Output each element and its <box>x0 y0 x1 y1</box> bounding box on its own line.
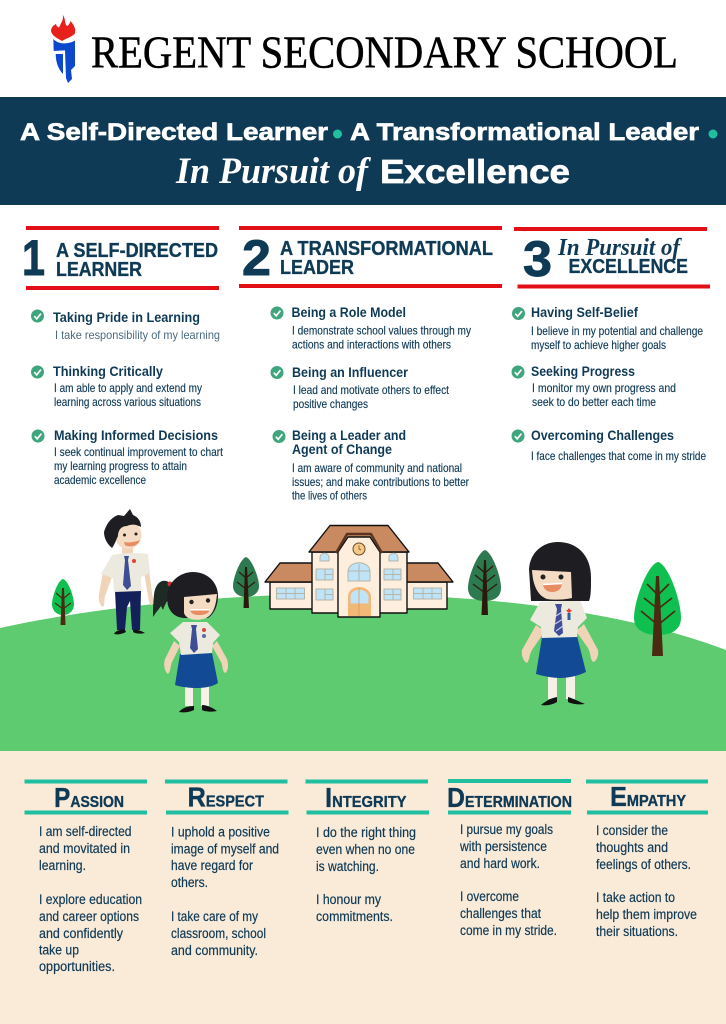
character: boy student <box>99 509 153 634</box>
item: taking pride in learning: Taking Pride in Learning <box>53 310 200 325</box>
panel: in pursuit of excellence <box>512 227 710 463</box>
item: having self-belief: myself to achieve higher goals <box>531 338 666 352</box>
value: empathy <box>586 780 708 939</box>
tie <box>123 556 131 590</box>
value: respect: classroom, school <box>171 926 266 941</box>
heading: section three: 3 <box>523 231 552 287</box>
central block <box>312 552 407 613</box>
value: passion: and confidently <box>39 926 123 941</box>
hair <box>104 509 141 548</box>
item: being a leader and agent of change <box>272 428 469 502</box>
item: being a leader and agent of change: Being a Leader and <box>292 428 406 443</box>
value: determination: challenges that <box>460 906 541 921</box>
door <box>348 587 371 616</box>
value: determination: DETERMINATION <box>447 782 572 813</box>
value: respect: and community. <box>171 943 258 958</box>
heading: section three: EXCELLENCE <box>568 256 688 278</box>
value: determination: with persistence <box>459 839 547 854</box>
item: seeking progress: Seeking Progress <box>531 364 635 379</box>
value: passion: and movitated in <box>39 841 130 856</box>
trousers <box>115 591 141 630</box>
value: passion: PASSION <box>54 782 124 813</box>
value: respect <box>165 780 288 958</box>
item: taking pride in learning: I take responsibility of my learning <box>55 328 220 342</box>
value: passion: I explore education <box>39 892 142 907</box>
value: passion <box>24 780 147 974</box>
ponytail <box>153 581 172 617</box>
item: taking pride in learning <box>31 310 220 342</box>
item: being a leader and agent of change: Agent of Change <box>292 442 392 457</box>
badge <box>132 559 136 563</box>
skirt <box>536 636 586 678</box>
arms <box>99 570 153 607</box>
heading: section two: 2 <box>242 230 271 286</box>
arms <box>164 641 228 674</box>
item: thinking critically: I am able to apply and extend my <box>54 381 202 395</box>
green hill <box>0 594 726 752</box>
item: seeking progress: I monitor my own progress and <box>532 381 676 395</box>
item: making informed decisions: my learning progress to attain <box>54 459 187 473</box>
value: respect: I take care of my <box>171 909 258 924</box>
value: determination: come in my stride. <box>460 923 557 938</box>
right wing <box>406 582 447 609</box>
windows <box>276 553 442 600</box>
value: empathy: feelings of others. <box>596 857 691 872</box>
tie <box>190 625 198 653</box>
item: thinking critically <box>31 364 202 409</box>
value: integrity: is watching. <box>316 859 379 874</box>
value: integrity: commitments. <box>316 909 393 924</box>
hair <box>167 572 218 618</box>
item: making informed decisions: academic excellence <box>54 473 146 487</box>
panel: a self-directed learner <box>22 226 224 487</box>
value: integrity: I honour my <box>316 892 381 907</box>
clock <box>353 543 365 555</box>
school name: REGENT SECONDARY SCHOOL <box>91 28 678 78</box>
value: empathy: I consider the <box>596 823 668 838</box>
icon: school torch logo <box>51 15 75 83</box>
value: passion: and career options <box>39 909 139 924</box>
face <box>532 570 572 600</box>
value: integrity: INTEGRITY <box>325 782 407 813</box>
legs <box>548 675 557 699</box>
item: having self-belief: Having Self-Belief <box>531 305 638 320</box>
banner line two <box>175 151 570 192</box>
item: making informed decisions: I seek continual improvement to chart <box>54 445 224 459</box>
item: being a role model: actions and interactions with others <box>292 338 451 352</box>
banner line one: A Self-Directed Learner <box>20 119 328 146</box>
shoes <box>179 705 217 712</box>
left wing <box>270 582 313 609</box>
value: determination: and hard work. <box>460 856 540 871</box>
hair <box>529 542 591 601</box>
value: determination <box>447 779 572 938</box>
value: respect: I uphold a positive <box>171 824 270 840</box>
item: being an influencer: positive changes <box>293 397 368 411</box>
banner line one <box>20 119 718 146</box>
heading: section one: A SELF-DIRECTED <box>56 240 218 262</box>
value: empathy: thoughts and <box>596 840 668 855</box>
value: respect: others. <box>171 875 208 890</box>
icon: medium dark tree <box>468 550 501 615</box>
value: respect: image of myself and <box>171 842 279 856</box>
item: being an influencer: I lead and motivate others to effect <box>293 383 450 397</box>
item: overcoming challenges <box>512 428 706 463</box>
value: integrity: even when no one <box>316 842 415 857</box>
value: integrity: I do the right thing <box>316 825 416 840</box>
item: being a leader and agent of change: the lives of others <box>292 488 367 502</box>
shirt <box>101 553 150 592</box>
value: integrity <box>306 780 429 924</box>
item: making informed decisions <box>32 428 224 487</box>
arms <box>522 624 598 663</box>
value: empathy: their situations. <box>596 924 678 939</box>
icon: small bright tree <box>52 579 74 625</box>
legs <box>185 685 193 706</box>
tie <box>554 604 563 636</box>
neck <box>122 545 133 557</box>
value: passion: opportunities. <box>39 959 115 974</box>
heading: section two: A TRANSFORMATIONAL <box>280 238 493 260</box>
smile <box>543 584 562 592</box>
item: being a leader and agent of change: issues; and make contributions to better <box>292 475 469 489</box>
value: respect: have regard for <box>171 858 253 873</box>
header: school logo and name <box>51 15 678 83</box>
shoes <box>541 697 585 705</box>
value: determination: I overcome <box>460 889 519 904</box>
banner: vision statement <box>0 97 726 205</box>
item: overcoming challenges: Overcoming Challenges <box>531 428 674 443</box>
heading: section two <box>239 226 502 288</box>
heading: section two: LEADER <box>280 257 354 279</box>
item: making informed decisions: Making Informed Decisions <box>54 428 218 443</box>
icon: school building <box>265 526 453 617</box>
item: being an influencer <box>270 365 450 411</box>
value: respect: RESPECT <box>188 782 264 812</box>
face <box>184 594 217 620</box>
heading: section three: In Pursuit of <box>557 235 682 261</box>
value: empathy: I take action to <box>596 890 675 905</box>
skirt <box>175 653 218 688</box>
item: being a role model: I demonstrate school values through my <box>292 324 471 338</box>
item: being a role model: Being a Role Model <box>292 305 406 320</box>
item: thinking critically: Thinking Critically <box>53 364 163 379</box>
value: empathy: help them improve <box>596 907 697 922</box>
panel: school values <box>0 751 726 1024</box>
heading: section one <box>22 226 219 290</box>
shoes <box>114 630 145 634</box>
item: being a role model <box>270 305 471 352</box>
illustration: school on a green hill <box>0 509 726 752</box>
icon: small dark tree <box>233 557 259 608</box>
value: determination: I pursue my goals <box>460 822 553 837</box>
value: passion: take up <box>39 942 79 958</box>
face <box>124 540 140 546</box>
shirt <box>530 600 587 638</box>
value: passion: I am self-directed <box>39 824 132 839</box>
heading: section three <box>514 227 710 288</box>
item: seeking progress <box>512 364 676 409</box>
banner line one: A Transformational Leader <box>350 119 699 146</box>
character: girl with bob hair <box>522 542 598 705</box>
banner line two: In Pursuit of <box>175 151 372 192</box>
banner line two: Excellence <box>380 153 570 190</box>
heading: section one: LEARNER <box>56 259 142 281</box>
value: empathy: EMPATHY <box>610 781 686 812</box>
value: passion: learning. <box>39 858 86 873</box>
heading: section one: 1 <box>22 230 45 286</box>
item: having self-belief <box>512 305 703 352</box>
panel: a transformational leader <box>239 226 502 502</box>
item: being a leader and agent of change: I am aware of community and national <box>292 461 462 475</box>
shirt <box>170 622 220 655</box>
item: seeking progress: seek to do better each time <box>532 395 656 409</box>
badge <box>566 608 572 613</box>
head <box>114 521 142 549</box>
item: thinking critically: learning across various situations <box>54 395 201 409</box>
badge <box>202 628 206 632</box>
item: being an influencer: Being an Influencer <box>292 365 409 380</box>
character: girl with ponytail <box>153 572 228 712</box>
icon: large bright tree <box>634 562 681 656</box>
